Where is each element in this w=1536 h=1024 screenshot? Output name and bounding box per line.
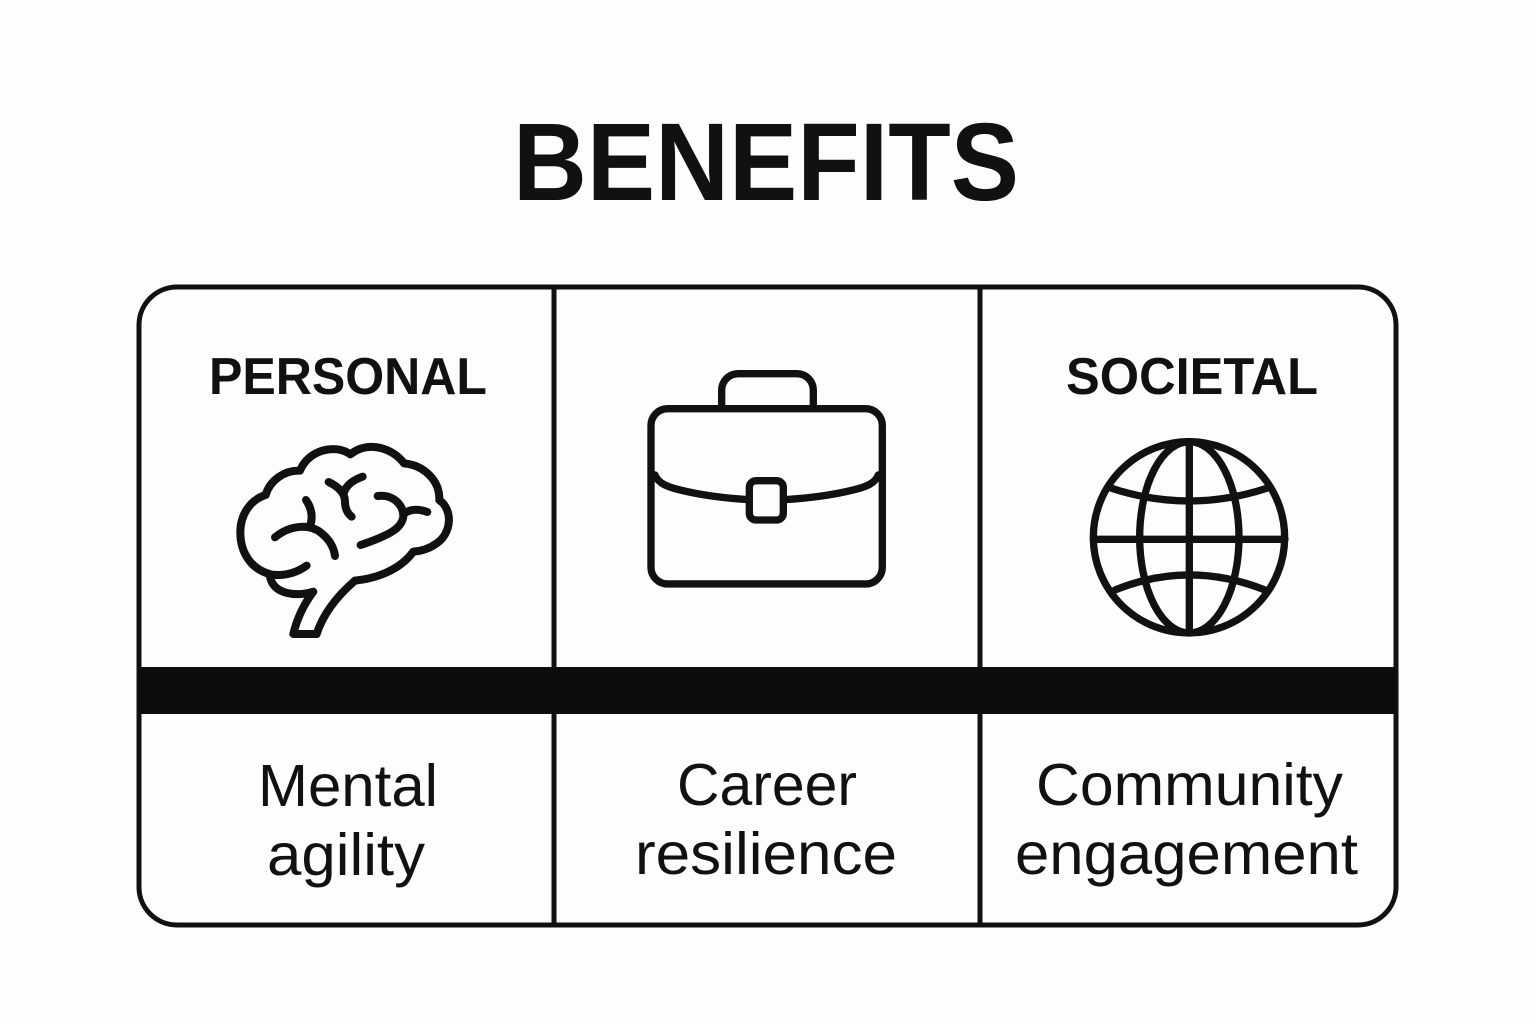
label: career resilience: Career: [677, 752, 857, 818]
label: community engagement: engagement: [1015, 821, 1358, 887]
heading: personal: PERSONAL: [209, 348, 487, 406]
icon: briefcase: [651, 374, 882, 584]
label: community engagement: [1015, 752, 1358, 887]
label: career resilience: resilience: [635, 821, 897, 887]
icon: globe: [1093, 442, 1285, 633]
heading: societal: SOCIETAL: [1066, 348, 1318, 406]
icon: brain: [240, 447, 449, 634]
title: BENEFITS: [513, 101, 1019, 224]
label: mental agility: Mental: [258, 753, 438, 819]
label: mental agility: [258, 753, 438, 888]
label: mental agility: agility: [267, 822, 426, 888]
benefits table: [139, 287, 1396, 925]
label: career resilience: [635, 752, 897, 887]
label: community engagement: Community: [1036, 752, 1344, 818]
